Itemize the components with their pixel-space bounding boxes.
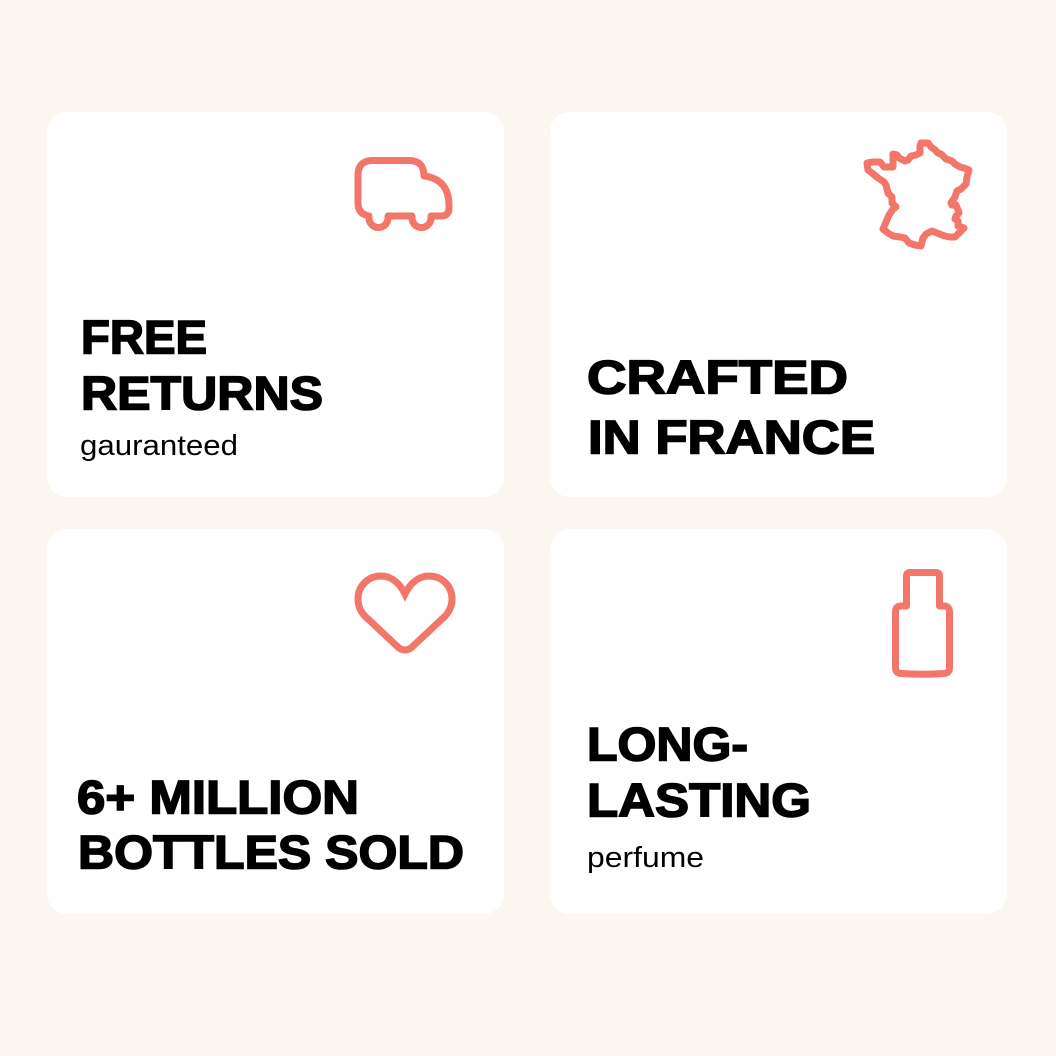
heading: free returns	[81, 310, 323, 420]
icon: delivery truck	[358, 160, 449, 228]
heading: crafted in france: CRAFTED	[587, 350, 848, 404]
heading: 6+ million bottles sold	[77, 770, 464, 878]
heading: 6+ million bottles sold: 6+ MILLION	[77, 770, 359, 824]
heading: free returns: FREE	[81, 310, 207, 364]
icon: perfume bottle	[896, 572, 950, 674]
panel: 6+ million bottles sold	[47, 529, 504, 914]
panel: free returns	[47, 112, 504, 497]
icon: map of france	[867, 143, 969, 246]
heading: long-lasting: LASTING	[587, 774, 811, 826]
heading: 6+ million bottles sold: BOTTLES SOLD	[78, 826, 464, 878]
heading: crafted in france	[587, 350, 875, 464]
panel: long-lasting perfume	[550, 529, 1007, 914]
heading: long-lasting	[587, 718, 811, 826]
panel: crafted in france	[550, 112, 1007, 497]
heading: free returns: RETURNS	[81, 366, 323, 420]
heading: crafted in france: IN FRANCE	[588, 410, 875, 464]
heading: long-lasting: LONG-	[587, 718, 748, 770]
icon: heart	[358, 576, 452, 650]
subtext: perfume: perfume	[587, 842, 704, 874]
subtext: gauranteed: gauranteed	[80, 430, 238, 462]
